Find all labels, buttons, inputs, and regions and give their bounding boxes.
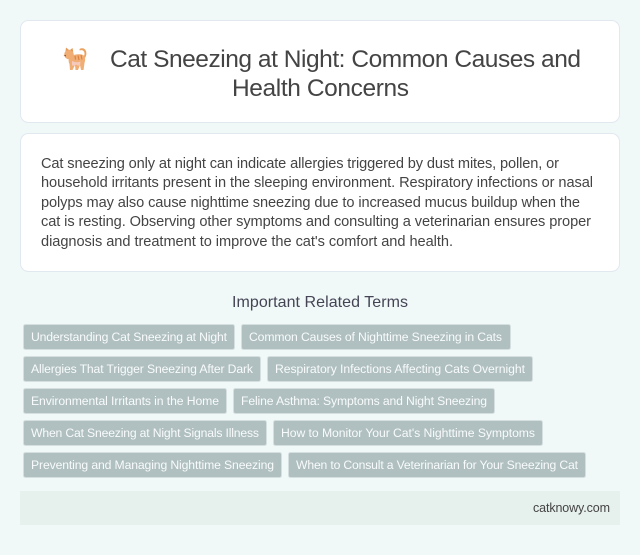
title: Health Concerns (232, 75, 409, 102)
text block: description: household irritants present in the sleeping environment. Respiratory infections or nasal (41, 175, 593, 191)
tag (24, 420, 266, 446)
panel: description (20, 134, 620, 272)
panel: title card (20, 20, 620, 122)
tag (24, 324, 234, 350)
tag: How to Monitor Your Cat's Nighttime Symptoms (281, 426, 535, 440)
tag: Preventing and Managing Nighttime Sneezing (31, 458, 274, 472)
tag (24, 388, 226, 414)
tag: Environmental Irritants in the Home (31, 394, 219, 408)
tag (288, 452, 586, 478)
tag: Allergies That Trigger Sneezing After Dark (31, 362, 254, 376)
tag (234, 388, 494, 414)
tag (24, 356, 260, 382)
tag: Respiratory Infections Affecting Cats Overnight (275, 362, 526, 376)
text block: description (41, 156, 593, 250)
icon: orange cat (64, 48, 86, 70)
tag (242, 324, 510, 350)
title (110, 46, 581, 102)
tag: Feline Asthma: Symptoms and Night Sneezing (241, 394, 487, 408)
footer: catknowy.com (533, 501, 610, 515)
tag (24, 452, 282, 478)
tag list (24, 324, 586, 478)
tag (274, 420, 542, 446)
tag: Understanding Cat Sneezing at Night (31, 330, 228, 344)
tag: When Cat Sneezing at Night Signals Illness (31, 426, 259, 440)
text block: description: Cat sneezing only at night can indicate allergies triggered by dust mites, pollen, or (41, 156, 559, 172)
text block: description: polyps may also cause nighttime sneezing due to increased mucus buildup when the (41, 195, 580, 211)
text block: description: diagnosis and treatment to improve the cat's comfort and health. (41, 234, 453, 250)
text block: description: cat is resting. Observing other symptoms and consulting a veterinarian ensures proper (41, 214, 591, 230)
title: Cat Sneezing at Night: Common Causes and (110, 46, 581, 73)
footer (20, 491, 620, 525)
heading: related terms: Important Related Terms (232, 294, 408, 311)
tag (268, 356, 532, 382)
tag: Common Causes of Nighttime Sneezing in Cats (249, 330, 502, 344)
tag: When to Consult a Veterinarian for Your Sneezing Cat (296, 458, 579, 472)
